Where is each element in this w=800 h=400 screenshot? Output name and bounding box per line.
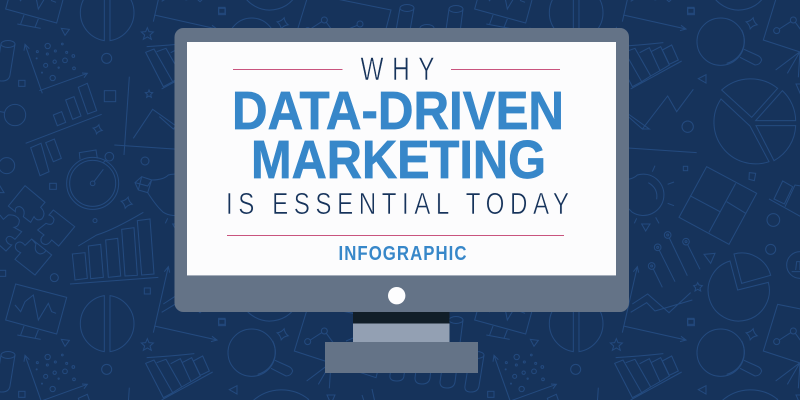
- monitor frame: [174, 28, 629, 312]
- rule left of why: [233, 69, 342, 70]
- monitor stand: [325, 311, 478, 373]
- rule below subheading: [227, 235, 564, 236]
- label: infographic: INFOGRAPHIC: [338, 242, 467, 264]
- heading: data-driven: DATA-DRIVEN: [232, 81, 564, 141]
- monitor screen with title: [187, 42, 616, 276]
- subheading: is essential today: IS ESSENTIAL TODAY: [226, 186, 569, 221]
- heading: why: WHY: [360, 52, 435, 88]
- rule right of why: [451, 69, 560, 70]
- heading: marketing: MARKETING: [251, 130, 546, 190]
- power button: [388, 287, 405, 304]
